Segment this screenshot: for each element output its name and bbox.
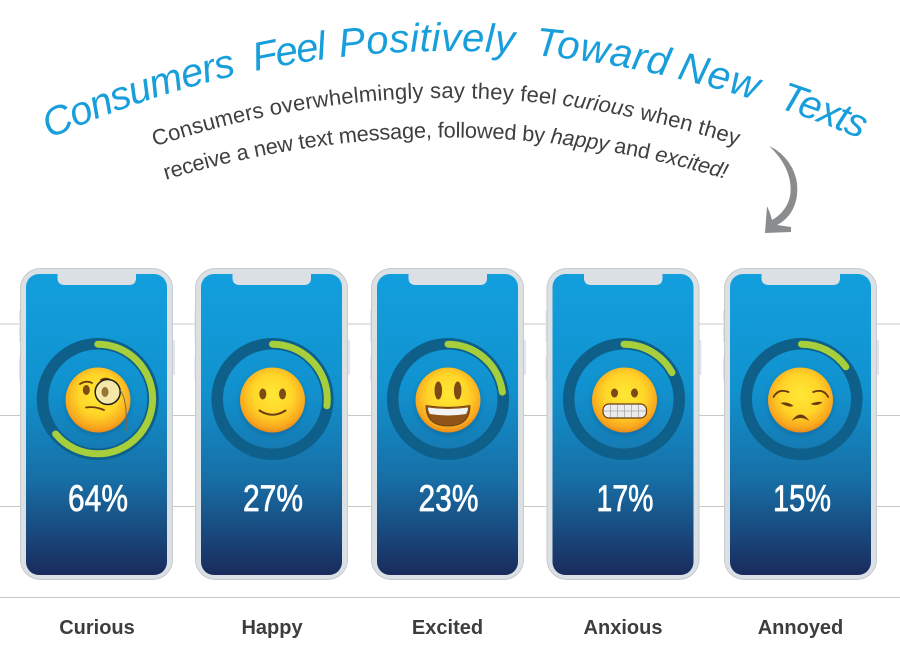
emoji: curious monocle face xyxy=(65,368,131,435)
progress ring 15% xyxy=(746,344,857,454)
title: Toward xyxy=(540,28,674,76)
phone: excited xyxy=(370,268,526,580)
phone: annoyed xyxy=(723,268,879,580)
arrow xyxy=(765,146,797,233)
progress ring 17% xyxy=(569,344,679,454)
category labels: Curious xyxy=(59,617,135,639)
subtitle text xyxy=(152,82,741,180)
progress ring 64% xyxy=(43,344,153,454)
title: Texts xyxy=(785,82,866,136)
percentage: 15% xyxy=(773,478,831,519)
phone: happy xyxy=(194,268,350,580)
emoji: unamused face xyxy=(768,368,834,435)
category labels: Happy xyxy=(241,617,303,639)
category labels xyxy=(59,617,843,639)
title: Positively xyxy=(341,22,518,60)
phone: curious xyxy=(19,268,175,580)
percentage: 17% xyxy=(596,478,654,519)
phone: anxious xyxy=(546,268,702,580)
category labels: Anxious xyxy=(584,617,662,639)
title: Consumers xyxy=(45,56,234,135)
percentage: 23% xyxy=(418,478,478,519)
subtitle text: Consumers overwhelmingly say they feel curious when they xyxy=(152,82,741,148)
percentage: 27% xyxy=(243,478,303,519)
progress ring 27% xyxy=(217,344,328,454)
percentage: 64% xyxy=(68,478,128,519)
subtitle text: receive a new text message, followed by happy and excited! xyxy=(164,122,730,180)
emoji: grimacing face xyxy=(592,368,658,435)
title xyxy=(45,22,866,136)
emoji: smiling face xyxy=(240,368,306,435)
emoji: grinning face xyxy=(415,368,481,435)
category labels: Annoyed xyxy=(758,617,843,639)
title: Feel xyxy=(256,30,324,71)
category labels: Excited xyxy=(412,617,483,639)
title: New xyxy=(678,53,764,98)
progress ring 23% xyxy=(393,344,503,454)
